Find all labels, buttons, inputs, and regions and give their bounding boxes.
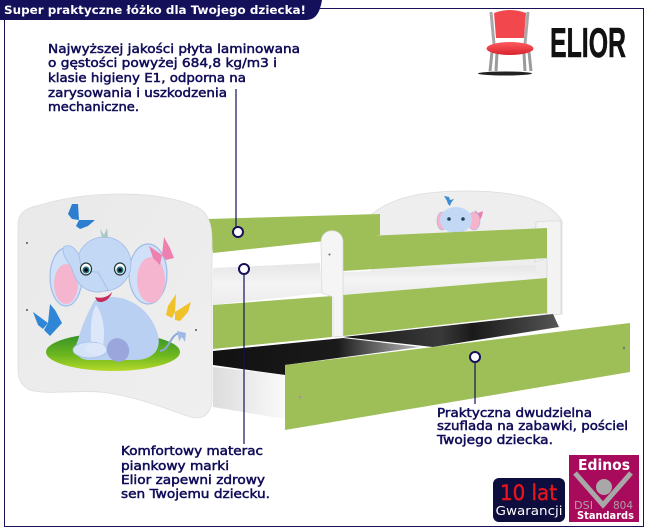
butterfly: blue left [33, 304, 62, 336]
drawer side [213, 367, 285, 419]
icon: red chair [478, 10, 534, 76]
back rail [208, 214, 380, 253]
head tuft [100, 228, 108, 238]
body [76, 297, 159, 360]
badge: 10 year warranty [493, 478, 565, 522]
text block: drawer: Twojego dziecka. [436, 432, 553, 447]
mattress [213, 263, 322, 305]
badge: Edinos standards: DSI [574, 499, 593, 512]
tail [160, 333, 180, 351]
back headboard [372, 191, 562, 314]
left ear [50, 248, 82, 306]
badge: 10 year warranty: 10 lat [500, 481, 557, 505]
text block: mattress: Komfortowy materac [121, 443, 263, 458]
bed illustration [18, 191, 630, 430]
text block: board quality [48, 41, 300, 114]
callout: board marker [233, 89, 243, 237]
front rail [343, 228, 547, 271]
text block: mattress: sen Twojemu dziecku. [121, 486, 270, 501]
front footboard panel [18, 194, 212, 418]
callout: mattress marker [239, 264, 249, 444]
text block: mattress [121, 443, 270, 501]
text block: mattress: Elior zapewni zdrowy [121, 472, 266, 487]
dark drawer interior [213, 338, 420, 375]
text block: board quality: Najwyższej jakości płyta laminowana [48, 41, 300, 56]
badge: Edinos standards: Standards [577, 510, 634, 522]
badge: 10 year warranty: Gwarancji [496, 504, 562, 518]
grass [46, 333, 180, 371]
right ear [129, 244, 167, 304]
badge: Edinos standards: 804 [613, 499, 633, 512]
rail post [321, 231, 343, 337]
head [77, 237, 131, 291]
text block: board quality: mechaniczne. [48, 99, 139, 114]
text block: board quality: zarysowania i uszkodzenia [48, 85, 227, 100]
logo: Elior [478, 10, 626, 76]
drawer front [285, 323, 630, 430]
badge: Edinos standards: Edinos [578, 456, 630, 474]
callout: drawer marker [470, 352, 480, 404]
butterfly: blue top [68, 204, 95, 229]
text block: drawer: szuflada na zabawki, pościel [437, 418, 628, 433]
text block: drawer [436, 405, 628, 447]
text block: board quality: klasie higieny E1, odporna na [48, 70, 246, 85]
lower green side rails [213, 296, 332, 349]
butterfly: pink [149, 237, 174, 265]
small elephant on headboard [437, 196, 483, 233]
elephant illustration [46, 228, 186, 371]
mouth [95, 292, 112, 302]
badge: Edinos standards [569, 455, 639, 522]
title banner [0, 0, 322, 20]
butterfly: yellow [166, 294, 191, 321]
text block: board quality: o gęstości powyżej 684,8 kg/m3 i [48, 55, 277, 70]
text block: mattress: piankowy marki [121, 458, 229, 473]
eyes [80, 263, 126, 275]
hind foot [103, 334, 133, 366]
text block: drawer: Praktyczna dwudzielna [437, 405, 592, 420]
trunk [63, 246, 108, 292]
right bed leg [535, 221, 561, 316]
front feet [73, 342, 107, 358]
title banner: Super praktyczne łóżko dla Twojego dziecka! [4, 3, 306, 17]
